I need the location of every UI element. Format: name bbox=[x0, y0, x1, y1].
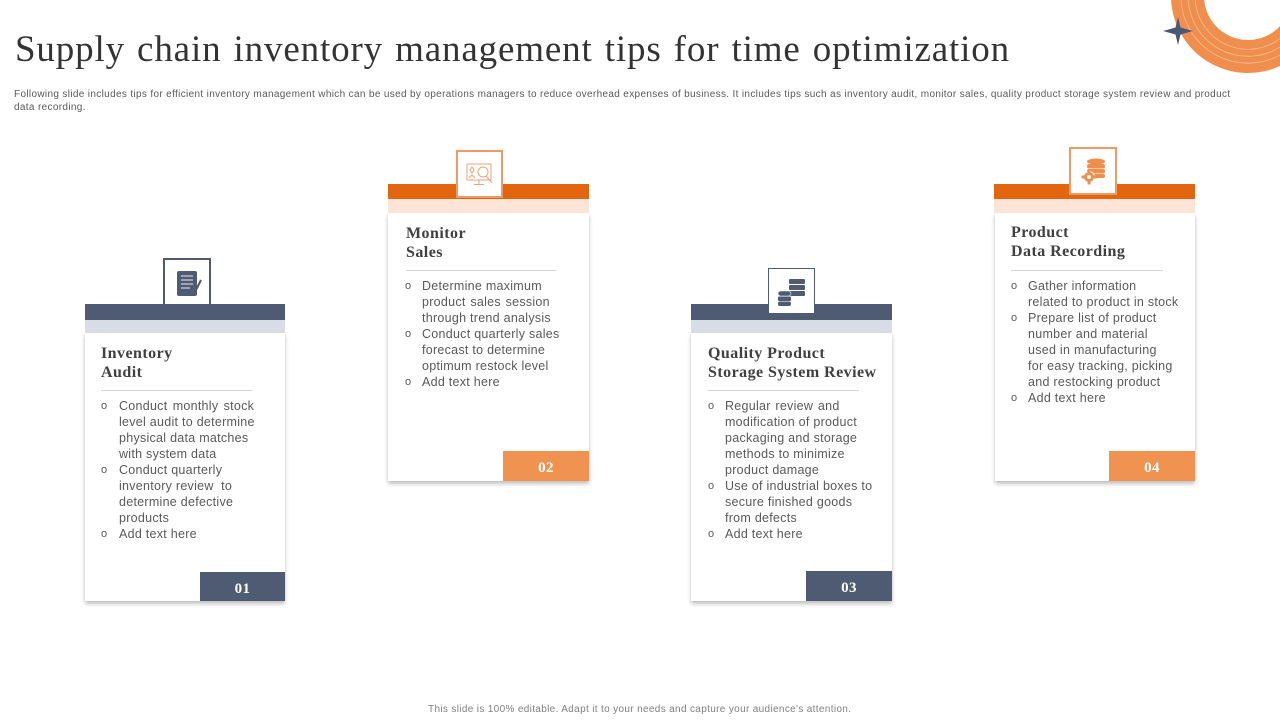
bullet list: modification of product bbox=[725, 415, 857, 429]
bullet list: Add text here bbox=[119, 527, 197, 541]
header bar bbox=[85, 304, 285, 320]
header tint bbox=[388, 199, 589, 213]
heading: Inventory bbox=[101, 345, 173, 362]
bullet list: determine defective bbox=[119, 495, 233, 509]
bullet list: level audit to determine bbox=[119, 415, 255, 429]
bullet list: physical data matches bbox=[119, 431, 248, 445]
bullet list: o bbox=[1011, 280, 1017, 292]
decorative ring bbox=[1171, 0, 1280, 73]
bullet list: Conduct monthly stock bbox=[119, 399, 254, 413]
bullet list: Determine maximum bbox=[422, 279, 542, 293]
bullet list: o bbox=[101, 528, 107, 540]
rule bbox=[101, 390, 252, 391]
icon: database with gear bbox=[1069, 147, 1117, 195]
heading: Product bbox=[1011, 224, 1069, 241]
bullet list: through trend analysis bbox=[422, 311, 551, 325]
header tint bbox=[691, 320, 892, 333]
bullet list: o bbox=[708, 528, 714, 540]
bullet list: packaging and storage bbox=[725, 431, 857, 445]
bullet list: Use of industrial boxes to bbox=[725, 479, 872, 493]
bullet list: o bbox=[101, 400, 107, 412]
bullet list bbox=[101, 399, 255, 541]
bullet list: o bbox=[405, 328, 411, 340]
bullet list: number and material bbox=[1028, 327, 1148, 341]
icon: monitor with magnifier bbox=[456, 150, 503, 198]
bullet list: o bbox=[405, 376, 411, 388]
bullet list: Regular review and bbox=[725, 399, 840, 413]
icon: four-point star bbox=[1163, 17, 1193, 45]
bullet list: Conduct quarterly bbox=[119, 463, 222, 477]
rule bbox=[1011, 270, 1163, 271]
card body bbox=[691, 333, 892, 601]
heading: Sales bbox=[406, 244, 443, 261]
panel: product data recording bbox=[993, 147, 1197, 486]
card body bbox=[388, 213, 589, 481]
bullet list: Gather information bbox=[1028, 279, 1136, 293]
number badge: 04 bbox=[1144, 460, 1160, 476]
heading bbox=[101, 345, 173, 381]
bullet list: o bbox=[708, 480, 714, 492]
intro text: Following slide includes tips for efficient inventory management which can be used by operations managers to reduce overhead expenses of business. It includes tips such as inventory audit, monitor sales, quality product storage system review and product bbox=[14, 89, 1230, 100]
header bar bbox=[691, 304, 892, 320]
heading: Storage System Review bbox=[708, 364, 877, 381]
heading bbox=[708, 345, 877, 381]
bullet list: and restocking product bbox=[1028, 375, 1160, 389]
bullet list: Add text here bbox=[725, 527, 803, 541]
bullet list: Conduct quarterly sales bbox=[422, 327, 560, 341]
heading: Audit bbox=[101, 364, 142, 381]
heading bbox=[406, 225, 466, 261]
number badge: 03 bbox=[841, 580, 857, 596]
bullet list bbox=[405, 279, 560, 389]
card body bbox=[995, 213, 1195, 481]
panel: quality product storage bbox=[689, 268, 894, 606]
bullet list bbox=[708, 399, 872, 541]
number badge bbox=[1109, 451, 1195, 481]
icon: notebook bbox=[163, 258, 211, 304]
bullet list: o bbox=[101, 464, 107, 476]
bullet list: product damage bbox=[725, 463, 819, 477]
bullet list: Prepare list of product bbox=[1028, 311, 1156, 325]
header tint bbox=[85, 320, 285, 333]
bullet list: secure finished goods bbox=[725, 495, 852, 509]
bullet list: Add text here bbox=[1028, 391, 1106, 405]
header bar bbox=[388, 184, 589, 199]
bullet list: products bbox=[119, 511, 169, 525]
rule bbox=[708, 390, 859, 391]
header bar bbox=[994, 184, 1195, 199]
bullet list: related to product in stock bbox=[1028, 295, 1178, 309]
bullet list: forecast to determine bbox=[422, 343, 545, 357]
bullet list bbox=[1011, 279, 1178, 405]
bullet list: o bbox=[708, 400, 714, 412]
bullet list: methods to minimize bbox=[725, 447, 845, 461]
bullet list: used in manufacturing bbox=[1028, 343, 1157, 357]
number badge bbox=[806, 571, 892, 601]
bullet list: o bbox=[1011, 392, 1017, 404]
number badge bbox=[200, 572, 285, 601]
bullet list: optimum restock level bbox=[422, 359, 549, 373]
heading: Data Recording bbox=[1011, 243, 1125, 260]
heading: Monitor bbox=[406, 225, 466, 242]
heading bbox=[1011, 224, 1125, 260]
bullet list: o bbox=[405, 280, 411, 292]
icon: database and server bbox=[768, 268, 815, 314]
bullet list: Add text here bbox=[422, 375, 500, 389]
header tint bbox=[994, 199, 1195, 213]
panel: monitor sales bbox=[386, 150, 591, 486]
title: Supply chain inventory management tips for time optimization bbox=[15, 29, 1010, 70]
card body bbox=[85, 333, 285, 601]
number badge: 01 bbox=[235, 581, 250, 597]
footer note: This slide is 100% editable. Adapt it to your needs and capture your audience's attention. bbox=[428, 704, 851, 715]
bullet list: inventory review to bbox=[119, 479, 232, 493]
intro text bbox=[14, 89, 1230, 113]
heading: Quality Product bbox=[708, 345, 825, 362]
bullet list: for easy tracking, picking bbox=[1028, 359, 1173, 373]
panel: inventory audit bbox=[83, 258, 287, 606]
rule bbox=[406, 270, 556, 271]
bullet list: o bbox=[1011, 312, 1017, 324]
bullet list: from defects bbox=[725, 511, 797, 525]
number badge bbox=[503, 451, 589, 481]
number badge: 02 bbox=[538, 460, 554, 476]
bullet list: product sales session bbox=[422, 295, 550, 309]
intro text: data recording. bbox=[14, 102, 86, 113]
bullet list: with system data bbox=[119, 447, 216, 461]
